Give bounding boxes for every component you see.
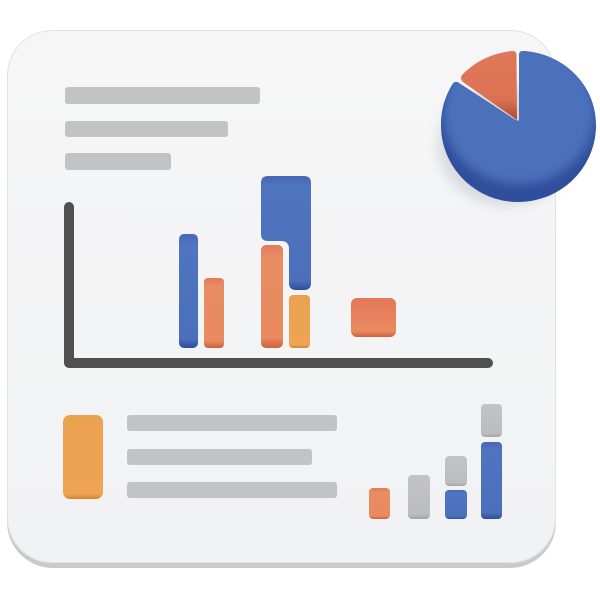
text lines: footer [127, 415, 337, 498]
bar: orange short [204, 278, 224, 348]
bar: amber [289, 295, 310, 348]
mini bar: gray upper [445, 456, 467, 486]
mini bar: blue [445, 490, 467, 519]
mini bar: gray [408, 475, 430, 519]
pie chart [436, 42, 600, 206]
bar: orange floating block [351, 298, 396, 337]
mini bar chart [369, 404, 502, 519]
bar: blue narrow [179, 234, 198, 348]
mini bar: blue tall [481, 442, 502, 519]
bar: orange tall [261, 245, 283, 348]
pie shadow [438, 86, 574, 206]
mini bar: orange [369, 488, 390, 519]
pie body: blue slice [441, 51, 596, 202]
mini bar: gray top [481, 404, 502, 437]
bar: blue stepped block [261, 176, 311, 290]
chart axes [69, 207, 488, 363]
pie slice: orange [461, 51, 517, 120]
text lines: header [65, 87, 260, 170]
legend swatch: amber block [63, 415, 103, 499]
bar chart [69, 176, 488, 363]
